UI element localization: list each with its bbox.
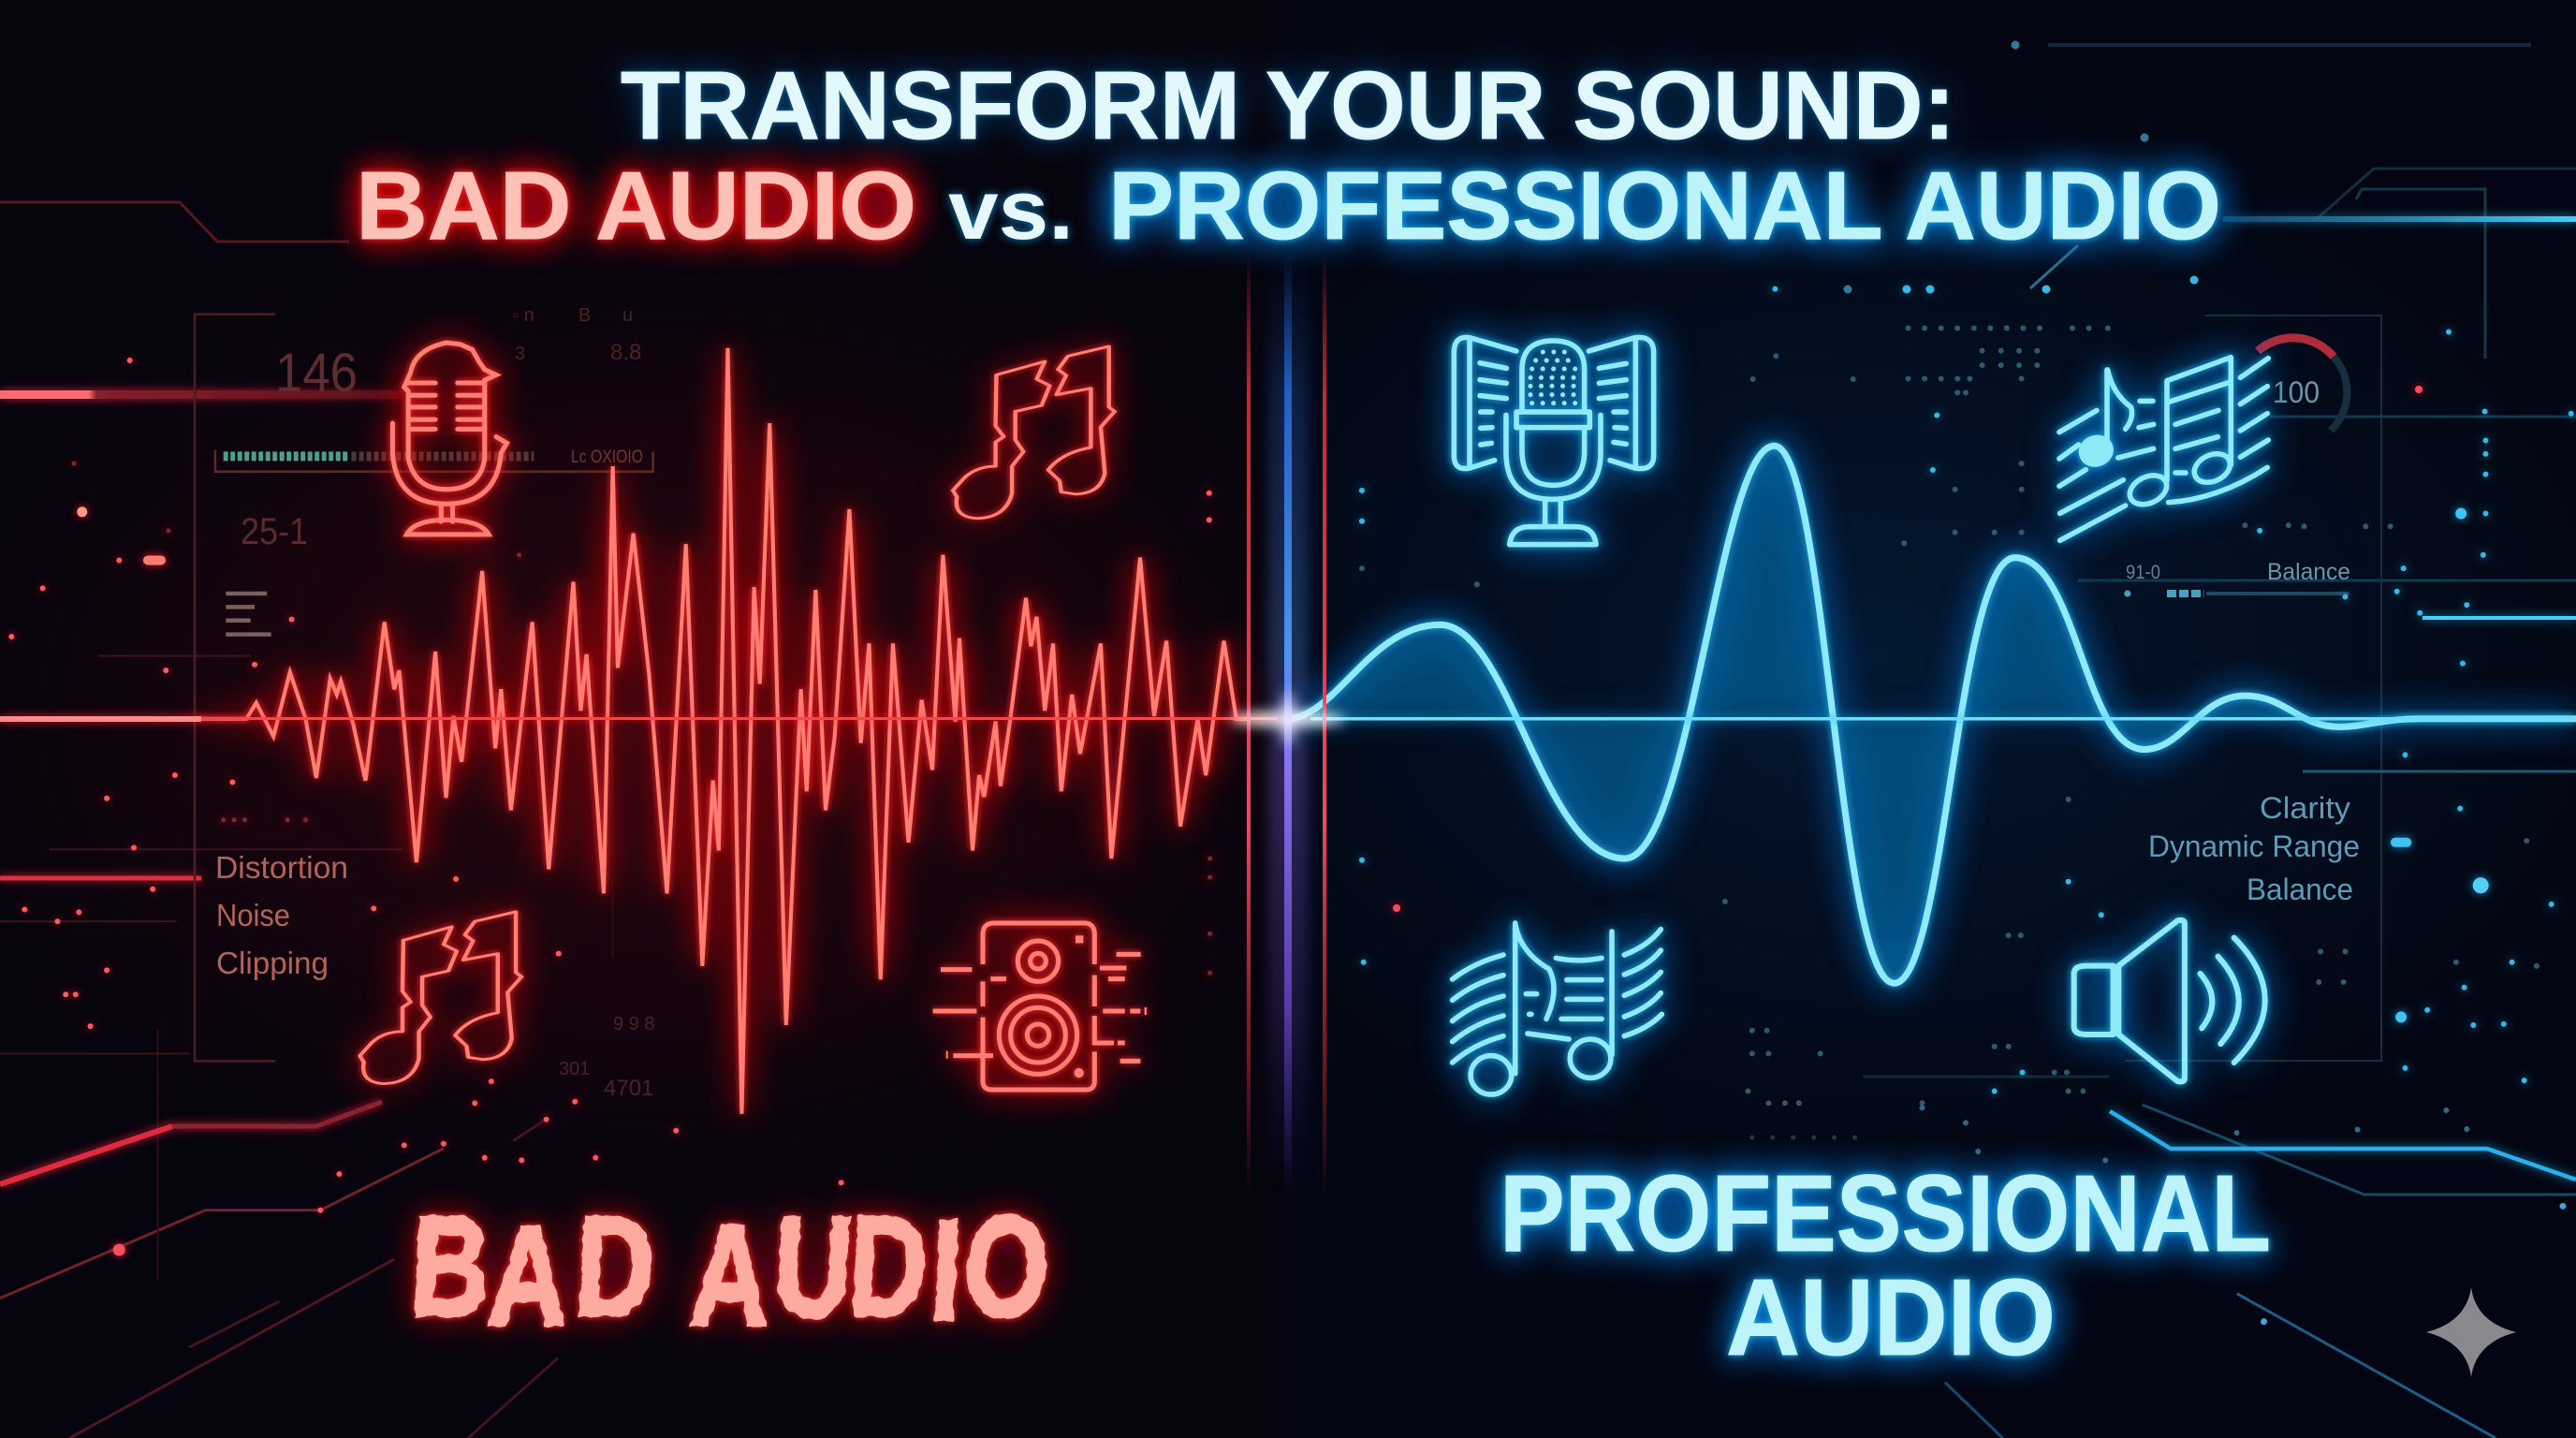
icon: loudspeaker xyxy=(2074,920,2265,1081)
divider flash xyxy=(1230,693,1346,745)
icon: broken music note top xyxy=(953,346,1115,519)
reading: meter caption: Lc OXIOIO xyxy=(571,448,643,467)
gauge dial xyxy=(2258,338,2347,431)
title line 2: versus: vs. xyxy=(948,164,1074,257)
small readouts: 8.8 xyxy=(610,340,641,365)
blue waveform: clean xyxy=(1288,446,2576,983)
icon: sparkle watermark xyxy=(2426,1287,2516,1377)
label: professional audio: PROFESSIONAL xyxy=(1500,1152,2271,1274)
circuit traces: right xyxy=(1863,45,2576,1438)
bright blue trace: upper right xyxy=(2223,216,2576,222)
label: professional audio: AUDIO xyxy=(1726,1256,2056,1378)
bright blue trace: mid right xyxy=(2422,616,2576,620)
reading: 146: 146 xyxy=(275,343,358,404)
icon: speaker cabinet xyxy=(933,923,1147,1090)
small readouts: u xyxy=(622,305,633,326)
divider: right red line xyxy=(1323,253,1326,1198)
data panel: professional audio xyxy=(2126,338,2350,594)
quality list: professional audio xyxy=(2148,791,2360,906)
red waveform: distorted xyxy=(198,348,1249,1114)
defect list: bad audio: Clipping xyxy=(216,946,329,980)
label: bad audio: BAD AUDIO xyxy=(406,1187,1053,1356)
label: Balance small: Balance xyxy=(2267,559,2350,585)
small readouts xyxy=(512,305,654,1101)
circuit traces: left xyxy=(0,202,559,1438)
particles: dim dot grid xyxy=(1362,45,2563,1322)
quality list: professional audio: Clarity xyxy=(2260,791,2350,825)
data panel: bad audio xyxy=(195,305,654,1101)
small readouts: 301 xyxy=(559,1059,590,1079)
small readouts: B xyxy=(578,305,591,326)
particles: red xyxy=(11,360,1210,1250)
label: professional audio xyxy=(1500,1152,2271,1378)
divider: blue line xyxy=(1284,253,1292,1198)
bright red trace: upper left xyxy=(0,390,402,399)
icon: broken music note bottom xyxy=(359,912,521,1084)
icon: studio microphone with reflection filter xyxy=(1454,337,1654,545)
defect list: bad audio xyxy=(215,850,348,980)
red indicator dots xyxy=(1397,389,2419,908)
quality list: professional audio: Balance xyxy=(2247,873,2353,906)
small readouts: 9 9 8 xyxy=(613,1014,654,1034)
centre divider xyxy=(1230,253,1346,1198)
quality list: professional audio: Dynamic Range xyxy=(2148,829,2360,863)
small readouts: ◦ n xyxy=(512,305,534,326)
small readouts: 4701 xyxy=(604,1076,653,1101)
title line 2: bad audio: BAD AUDIO xyxy=(356,152,916,259)
small readouts: 3 xyxy=(515,344,525,364)
defect list: bad audio: Distortion xyxy=(215,850,348,885)
icon: distorted microphone xyxy=(392,343,506,535)
reading: 100: 100 xyxy=(2273,375,2320,409)
title line 1: TRANSFORM YOUR SOUND: xyxy=(621,51,1955,159)
divider: left red line xyxy=(1247,253,1251,1198)
blue baseline xyxy=(1310,717,2576,721)
title line 2: professional audio: PROFESSIONAL AUDIO xyxy=(1108,152,2221,259)
icon: music notes on staff xyxy=(2059,358,2268,540)
bright blue trace: lower right xyxy=(2110,1111,2576,1180)
red baseline xyxy=(0,716,1278,722)
bright red trace: lower left xyxy=(0,1102,382,1184)
divider glow xyxy=(1268,253,1308,1198)
reading: 91-0: 91-0 xyxy=(2126,562,2160,583)
defect list: bad audio: Noise xyxy=(216,898,290,932)
icon: sheet music xyxy=(1453,923,1661,1094)
particles: blue xyxy=(1362,289,2571,1092)
reading: 25-1: 25-1 xyxy=(241,511,308,552)
bright red trace: middle left xyxy=(0,876,201,880)
